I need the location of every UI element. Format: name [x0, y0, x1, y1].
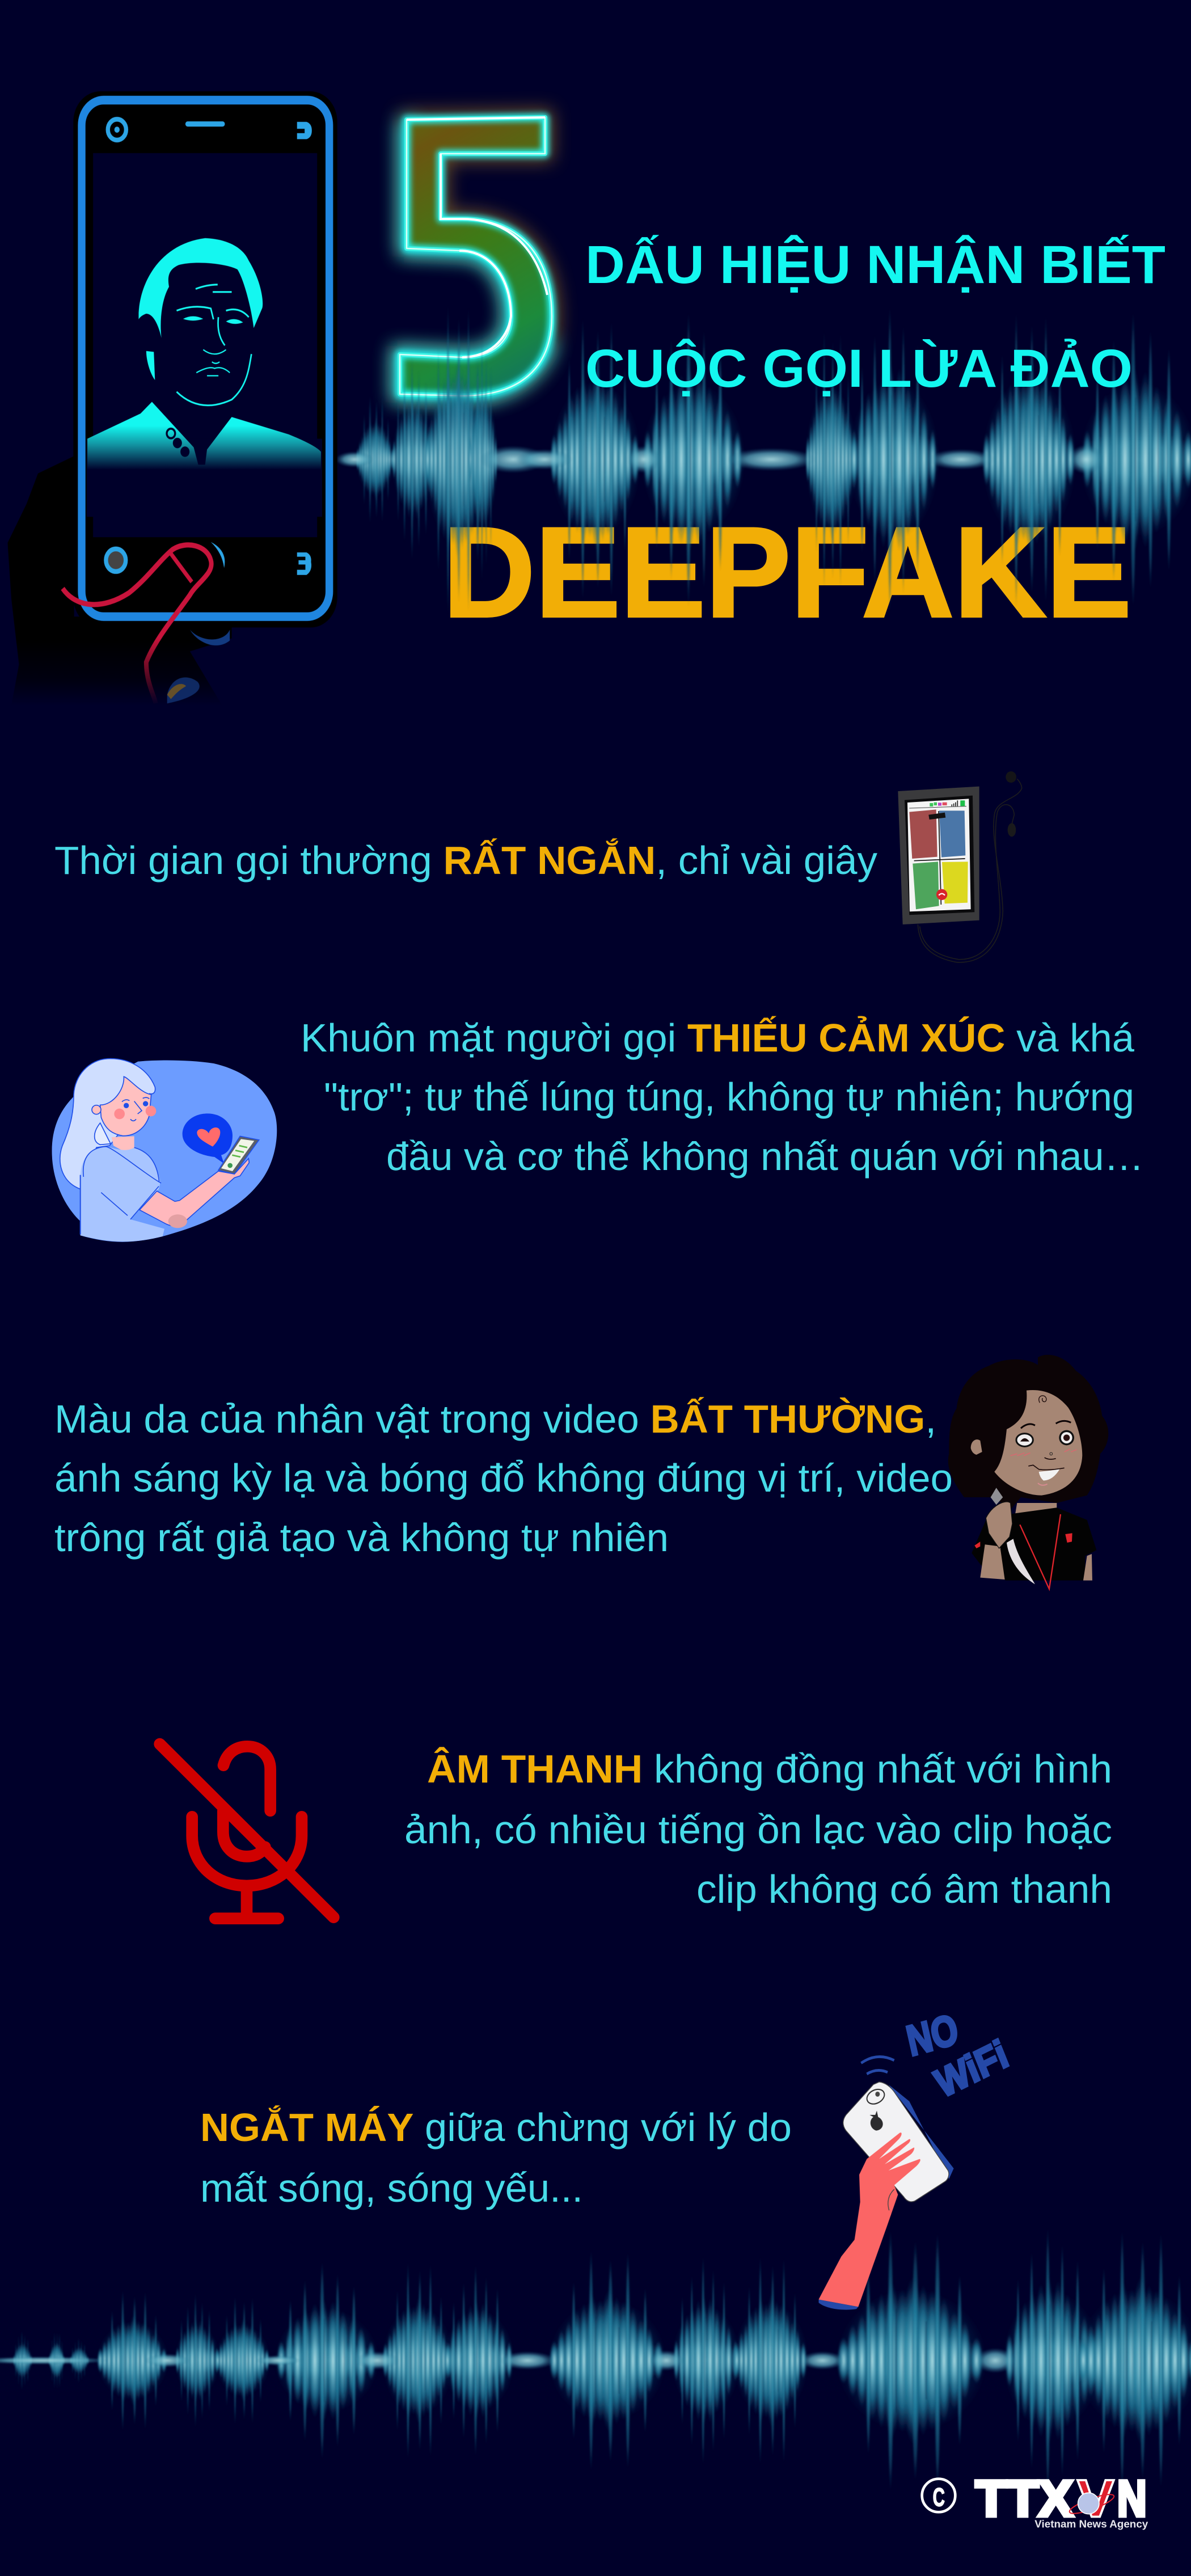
line 1: Màu da của nhân vật trong video BẤT THƯỜNG, — [54, 1397, 936, 1441]
agency name: Vietnam News Agency — [1034, 2518, 1148, 2530]
text block 2 — [301, 1016, 1144, 1179]
title line 2: CUỘC GỌI LỪA ĐẢO — [585, 339, 1133, 399]
label: no wifi: NO — [902, 2005, 962, 2066]
waveform: bottom — [0, 2227, 1191, 2494]
line 3: clip không có âm thanh — [696, 1867, 1112, 1911]
icon: girl with knife — [948, 1355, 1108, 1589]
text block 3 — [54, 1397, 953, 1560]
neon number 5 — [400, 117, 552, 396]
wordmark: N — [1117, 2470, 1147, 2527]
icon: no wifi hand — [818, 2005, 1014, 2310]
line 3: đầu và cơ thể không nhất quán với nhau… — [386, 1134, 1144, 1179]
icon: phone with earphones — [898, 771, 1022, 962]
line 2: mất sóng, sóng yếu... — [200, 2166, 583, 2210]
finger outline — [63, 545, 230, 703]
copyright mark: C — [933, 2482, 945, 2511]
phone body — [73, 91, 337, 627]
hand silhouette — [7, 456, 232, 706]
heading: DEEPFAKE: DEEPFAKE — [443, 500, 1131, 644]
line 1: NGẮT MÁY giữa chừng với lý do — [200, 2105, 792, 2150]
label: no wifi: WiFi — [930, 2032, 1014, 2106]
icon: woman with phone — [52, 1059, 277, 1242]
text block 4 — [404, 1746, 1112, 1911]
wordmark — [975, 2469, 1147, 2528]
line 2: "trơ"; tư thế lúng túng, không tự nhiên; hướng — [324, 1075, 1134, 1119]
line 1: Khuôn mặt người gọi THIẾU CẢM XÚC và khá — [301, 1016, 1134, 1060]
icon: muted microphone — [160, 1744, 333, 1919]
title line 1: DẤU HIỆU NHẬN BIẾT — [585, 234, 1165, 295]
waveform: top — [335, 303, 1191, 615]
person portrait — [87, 238, 321, 470]
logo: copyright and TTXVN — [922, 2469, 1148, 2530]
line 2: ảnh, có nhiều tiếng ồn lạc vào clip hoặc — [404, 1808, 1112, 1852]
wordmark: TTX — [975, 2470, 1073, 2527]
copyright mark — [922, 2479, 955, 2512]
line 2: ánh sáng kỳ lạ và bóng đổ không đúng vị trí, video — [54, 1456, 953, 1500]
text block 1: Thời gian gọi thường RẤT NGẮN, chỉ vài giây — [54, 838, 877, 882]
line 3: trông rất giả tạo và không tự nhiên — [54, 1515, 669, 1560]
label: no wifi — [902, 2005, 1014, 2106]
wordmark: V — [1077, 2469, 1114, 2528]
line 1: ÂM THANH không đồng nhất với hình — [427, 1746, 1112, 1791]
hero illustration: hand holding phone — [7, 91, 337, 706]
text block 5 — [200, 2105, 792, 2210]
